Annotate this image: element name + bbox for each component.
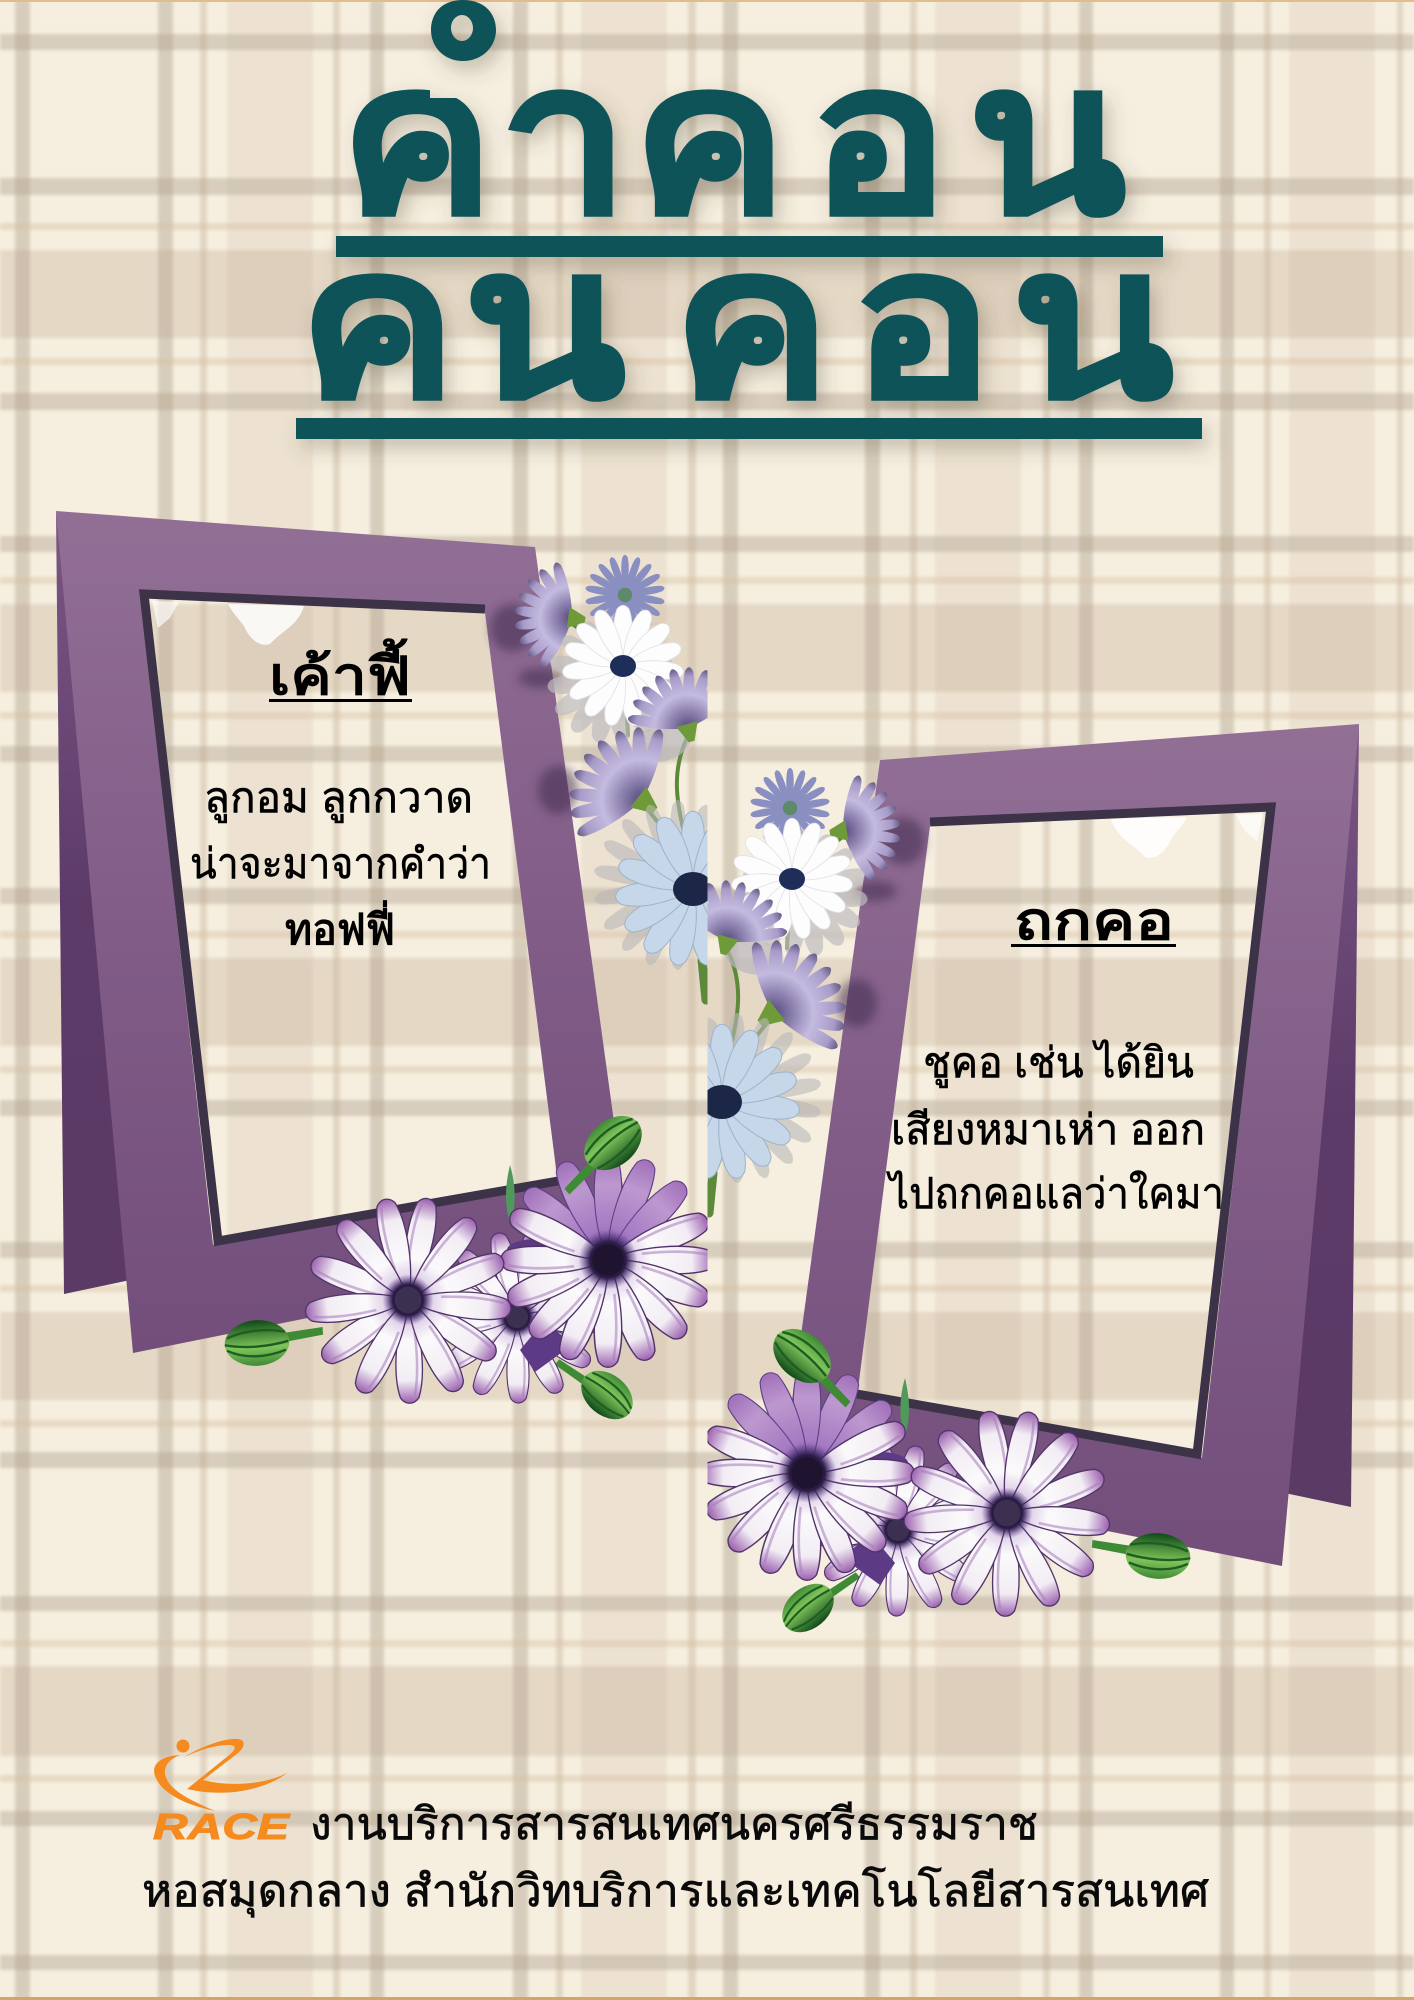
green bud top bbox=[547, 1105, 652, 1203]
heading: เค้าฟี้: เค้าฟี้ bbox=[269, 638, 411, 706]
nikhahit ring of title line 1 bbox=[431, 0, 496, 61]
purple daisy small bbox=[430, 1230, 604, 1403]
lilac side flower right bbox=[616, 654, 751, 768]
title line 1: คำคอน bbox=[340, 22, 1126, 257]
heading: ถกคอ: ถกคอ bbox=[1014, 893, 1174, 951]
frame inner edge bbox=[144, 594, 558, 1241]
white flower bbox=[547, 605, 684, 744]
green leaf bbox=[506, 1165, 515, 1225]
petal shadows on frame bbox=[490, 604, 578, 814]
purple daisy right bbox=[501, 1153, 715, 1367]
title line 2: คนคอน bbox=[298, 207, 1174, 441]
glass reflections bbox=[152, 601, 304, 645]
lilac side flower middle bbox=[542, 700, 698, 865]
blue flower small bbox=[585, 555, 665, 635]
frame back panel bbox=[56, 511, 135, 1294]
right photo frame with flowers (mirror) bbox=[643, 724, 1359, 1642]
right card text bbox=[886, 893, 1224, 1217]
dark petal accents bbox=[507, 1239, 572, 1372]
body line 1: ชูคอ เช่น ได้ยิน bbox=[923, 1039, 1194, 1088]
left photo frame with flowers bbox=[56, 511, 772, 1429]
heading underline bbox=[269, 699, 412, 702]
title rule 2 bbox=[296, 418, 1202, 439]
footer line 1: งานบริการสารสนเทศนครศรีธรรมราช bbox=[310, 1800, 1038, 1849]
green bud bottom bbox=[548, 1341, 642, 1429]
green bud left bbox=[223, 1316, 325, 1368]
RACE logo: RACE bbox=[153, 1806, 290, 1847]
footer text bbox=[142, 1800, 1209, 1918]
body line 3: ทอฟฟี่ bbox=[285, 900, 395, 953]
body line 2: น่าจะมาจากคำว่า bbox=[190, 840, 491, 887]
body line 3: ไปถกคอแลว่าใคมา bbox=[886, 1170, 1224, 1217]
pale blue flower bbox=[593, 800, 772, 970]
heading underline bbox=[1011, 944, 1176, 947]
title rule 1 bbox=[336, 236, 1163, 257]
purple daisy left bbox=[304, 1196, 512, 1403]
lilac side flower top bbox=[507, 556, 593, 674]
body line 2: เสียงหมาเห่า ออก bbox=[891, 1106, 1205, 1153]
footer line 2: หอสมุดกลาง สำนักวิทบริการและเทคโนโลยีสารสนเทศ bbox=[142, 1866, 1209, 1918]
left card text bbox=[190, 638, 491, 953]
frame front panel bbox=[56, 511, 632, 1353]
body line 1: ลูกอม ลูกกวาด bbox=[204, 774, 473, 823]
RACE logo bbox=[153, 1739, 290, 1847]
title: คำคอน คนคอน bbox=[296, 0, 1202, 441]
stems bbox=[567, 620, 706, 1000]
